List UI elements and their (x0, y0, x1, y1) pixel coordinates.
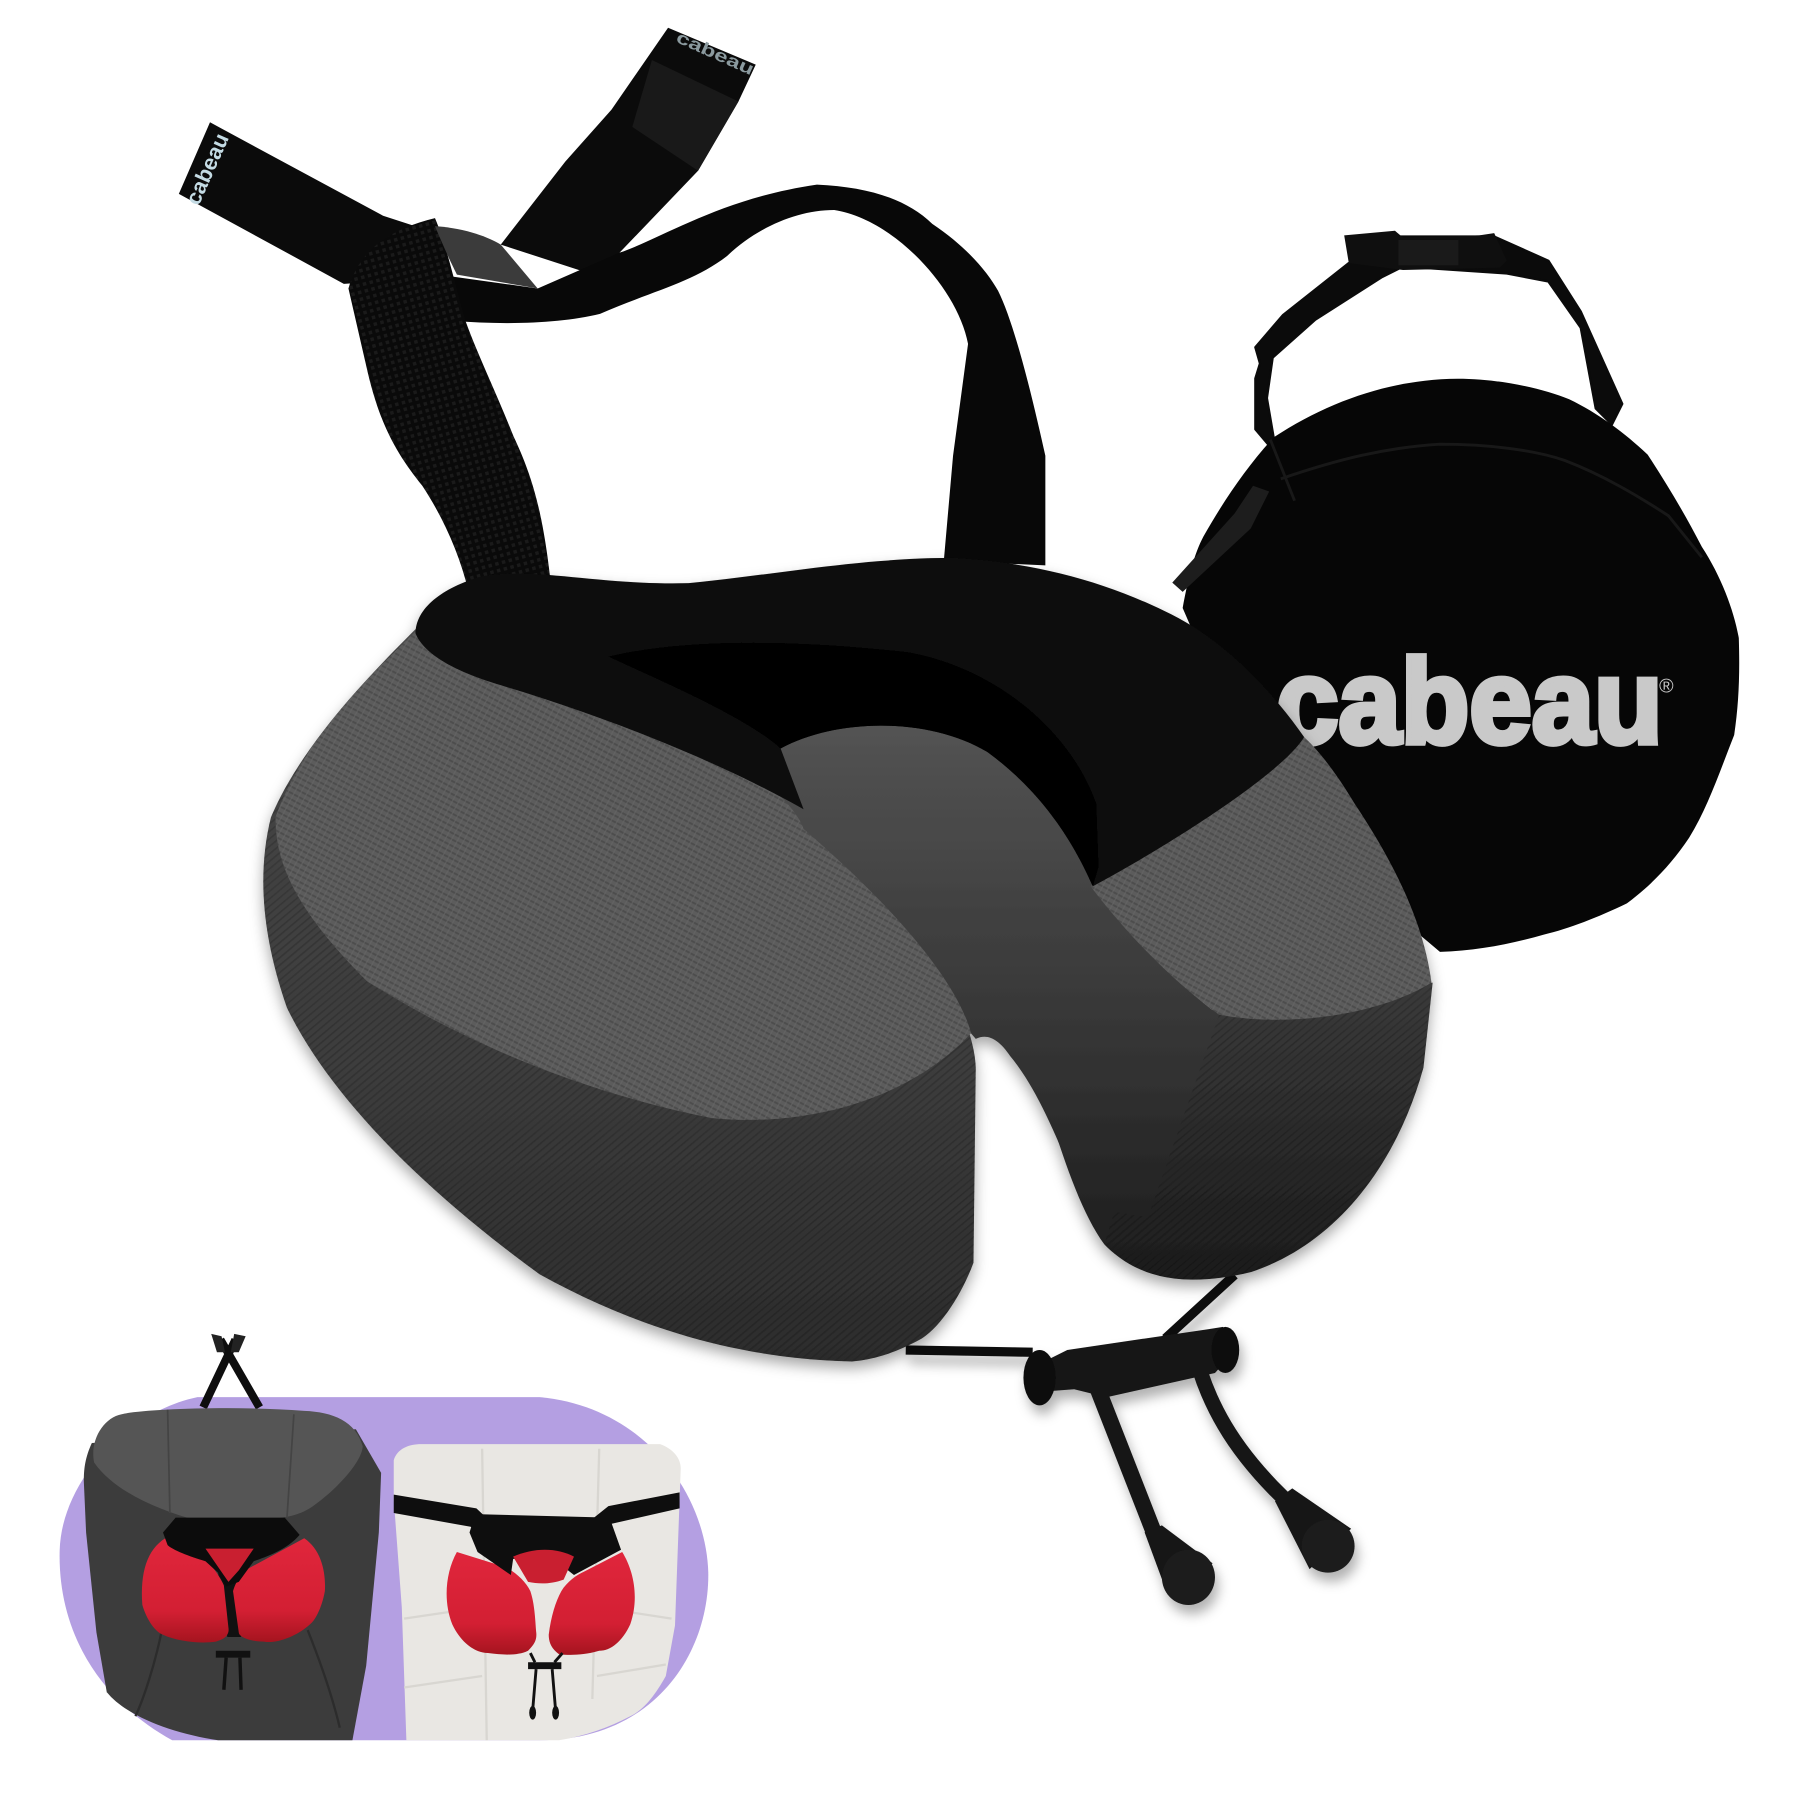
pillow right lobe side wall (1010, 983, 1433, 1280)
adjustable toggle and cords (906, 1275, 1355, 1605)
white seat pillow left lobe red (447, 1552, 536, 1655)
inset white seat (394, 1444, 681, 1740)
velcro strap (348, 218, 550, 591)
seat pillow gap shadow (218, 1573, 243, 1637)
cord right (1197, 1359, 1283, 1498)
strap end right (501, 27, 757, 277)
strap gray fold (435, 226, 538, 288)
inset purple background (60, 1397, 708, 1740)
seat back (84, 1429, 381, 1740)
seat headrest (93, 1408, 363, 1520)
straps (179, 27, 1045, 591)
inset dark seat (84, 1334, 381, 1740)
bag handle buckle (1344, 231, 1507, 270)
carry bag (1172, 231, 1739, 952)
white seat pillow right lobe red (549, 1552, 635, 1655)
seat pillow center red (205, 1549, 254, 1582)
white seat pillow black top (470, 1514, 621, 1575)
seat pillow left lobe red (142, 1538, 229, 1642)
strap end left: cabeau (180, 129, 234, 209)
long strap loop (438, 185, 1045, 565)
pillow (263, 558, 1433, 1361)
headrest seams (168, 1410, 294, 1518)
bag logo: ® (1659, 675, 1674, 697)
bag handle strap (1255, 237, 1622, 444)
bag body (1183, 379, 1739, 952)
seat pillow right lobe red (233, 1538, 325, 1642)
toggle cord top (906, 1275, 1235, 1352)
white seat pillow center red (513, 1550, 574, 1583)
cord left tip (1145, 1525, 1215, 1605)
white seat toggle (528, 1653, 562, 1720)
pillow left lobe texture (263, 629, 976, 1361)
inset: seat usage (60, 1334, 708, 1740)
white seat back (394, 1444, 681, 1740)
bag zipper seam (1270, 440, 1702, 557)
pillow neck recess (608, 643, 1099, 886)
pillow right lobe texture (1104, 983, 1433, 1280)
pillow black memory foam top (416, 558, 1304, 886)
seat top straps (203, 1334, 259, 1407)
cord left (1092, 1373, 1154, 1532)
pillow neck inner surface (769, 690, 1219, 1217)
cord right tip (1275, 1488, 1355, 1573)
toggle body (1023, 1327, 1239, 1405)
bag logo: cabeau (1276, 635, 1663, 769)
pillow left lobe side wall (263, 629, 976, 1361)
strap end left (179, 122, 453, 284)
white seat strap (394, 1492, 680, 1536)
seat lower contour lines (135, 1630, 340, 1728)
white seat quilting (404, 1449, 672, 1740)
strap end right: cabeau (673, 27, 757, 79)
seat toggle (216, 1651, 250, 1690)
pillow left top surface (276, 628, 971, 1120)
seat pillow black top (163, 1518, 300, 1586)
bag zipper pull (1172, 486, 1269, 592)
pillow right top surface (1091, 737, 1432, 1020)
